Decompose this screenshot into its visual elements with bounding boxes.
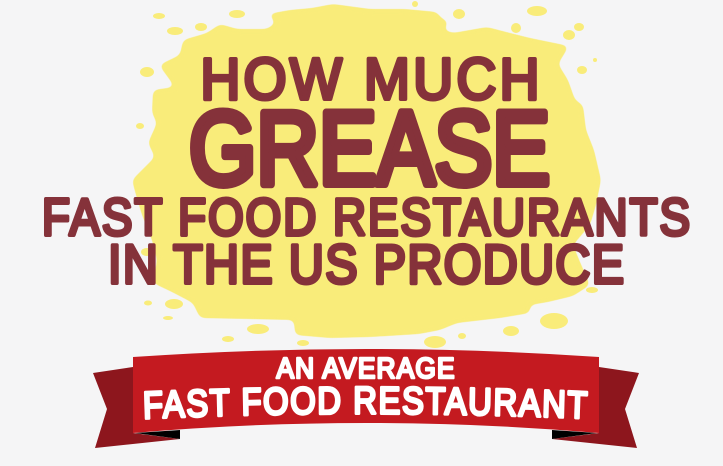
splat body — [132, 4, 601, 338]
splat droplets — [136, 1, 598, 348]
ribbon text: an average: AN AVERAGE — [276, 352, 455, 384]
title — [42, 47, 690, 295]
grease splat — [132, 1, 601, 348]
title line: fast food restaurants: FAST FOOD RESTAURANTS — [42, 189, 690, 247]
ribbon text — [144, 352, 588, 420]
ribbon right tail — [552, 367, 639, 448]
ribbon left tail — [93, 367, 180, 448]
title line: grease: GREASE — [189, 91, 550, 207]
ribbon banner — [93, 349, 639, 448]
ribbon text: fast food restaurant: FAST FOOD RESTAURANT — [144, 386, 588, 420]
ribbon main band — [133, 349, 599, 433]
ribbon left fold — [135, 430, 180, 439]
title line: in the us produce: IN THE US PRODUCE — [108, 233, 624, 295]
ribbon right fold — [552, 430, 597, 439]
title line: how much: HOW MUCH — [200, 47, 539, 111]
